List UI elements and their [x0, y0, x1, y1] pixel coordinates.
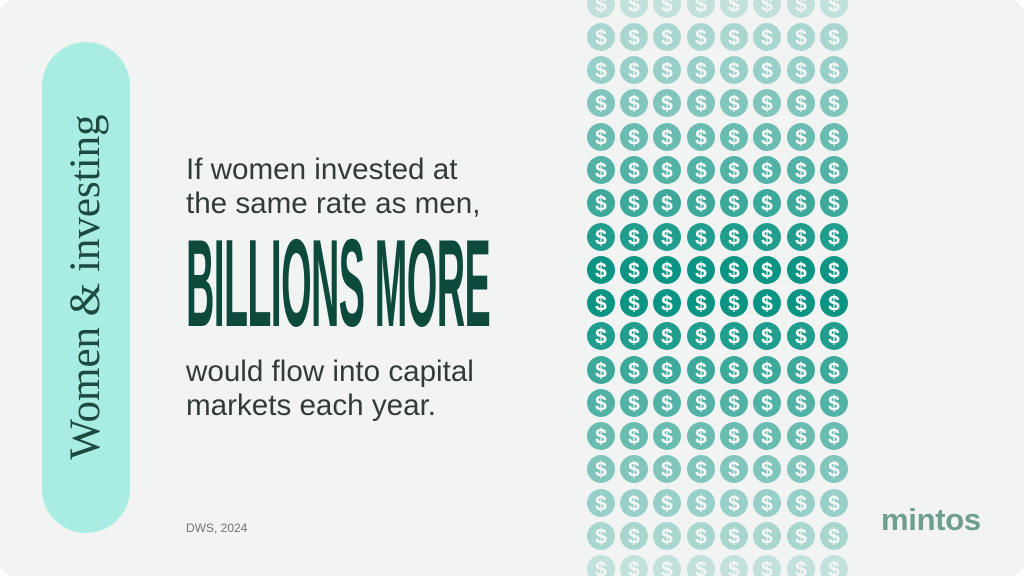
source: DWS, 2024 — [186, 521, 247, 535]
pill: Women & investing label — [42, 42, 130, 533]
closing text: would flow into capital — [186, 355, 474, 388]
closing text: markets each year. — [186, 389, 436, 422]
closing text — [186, 355, 474, 422]
vertical title: Women & investing — [62, 114, 109, 460]
headline: BILLIONS MORE: BILLIONS MORE — [186, 215, 490, 353]
intro text — [186, 153, 480, 220]
intro text: If women invested at — [186, 153, 457, 186]
logo: mintos: mintos — [881, 502, 981, 537]
intro text: the same rate as men, — [186, 187, 480, 220]
